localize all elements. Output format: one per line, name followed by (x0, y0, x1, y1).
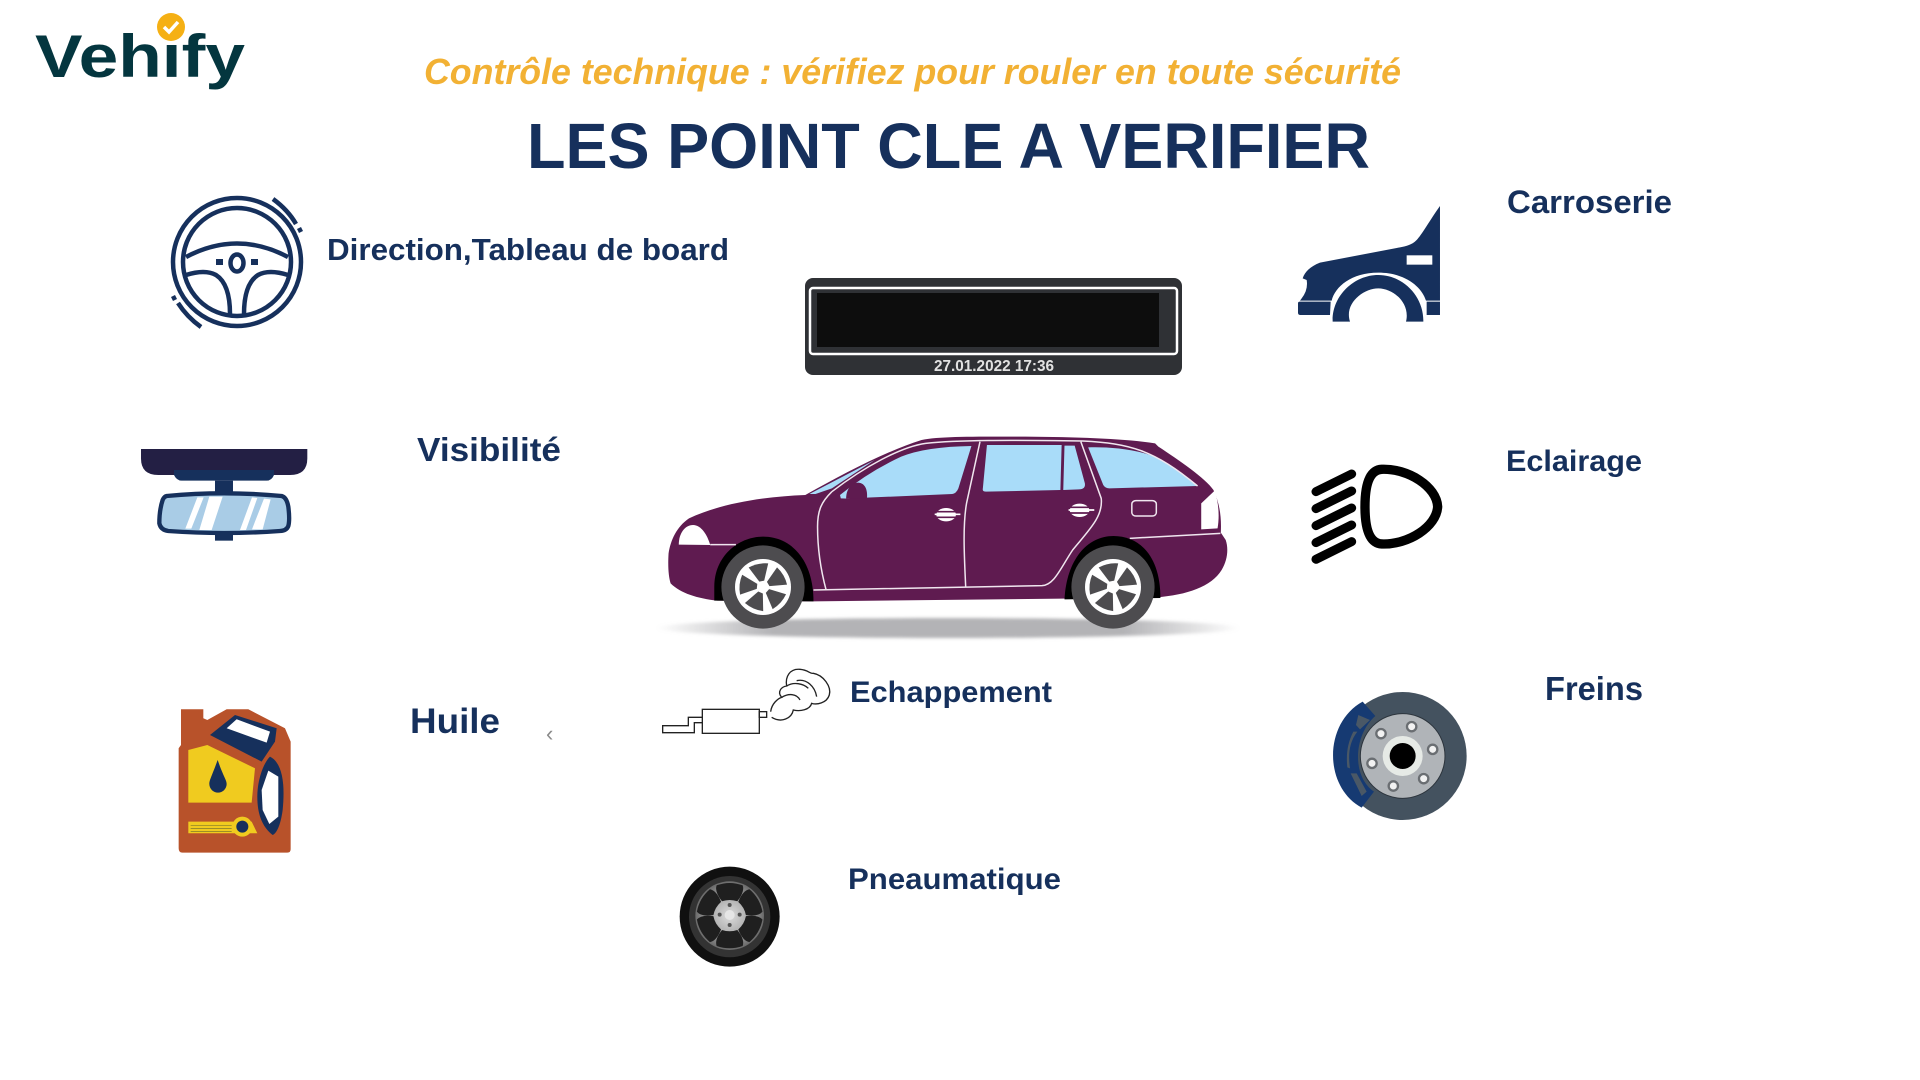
front wheel (721, 545, 805, 629)
icon: headlight (1316, 469, 1438, 559)
car shadow (656, 618, 1240, 638)
dashboard display (805, 278, 1182, 375)
rear wheel (1071, 545, 1155, 629)
car illustration (656, 437, 1240, 638)
logo: Vehify: Vehify (35, 23, 246, 90)
label: visibilite: Visibilité (417, 431, 561, 468)
label: huile: Huile (410, 702, 500, 741)
icon: car fender (1298, 206, 1440, 322)
label: echappement: Echappement (850, 676, 1052, 709)
car body (668, 437, 1227, 601)
label: freins: Freins (1545, 670, 1643, 707)
icon: rear-view mirror (141, 449, 307, 541)
label: pneumatique: Pneaumatique (848, 863, 1061, 896)
icon: exhaust with smoke (663, 669, 830, 733)
dashboard display: 27.01.2022 17:36 (934, 358, 1054, 375)
label: carroserie: Carroserie (1507, 184, 1672, 220)
icon: tyre (680, 867, 780, 967)
small chevron mark: ‹ (546, 721, 553, 746)
subtitle: Contrôle technique : vérifiez pour rouler en toute sécurité (424, 51, 1401, 92)
icon: steering wheel (173, 198, 301, 327)
label: eclairage: Eclairage (1506, 445, 1642, 478)
label: direction: Direction,Tableau de board (327, 232, 729, 267)
title: LES POINT CLE A VERIFIER (527, 110, 1370, 182)
icon: oil can (179, 709, 291, 853)
icon: brake disc (1333, 692, 1467, 820)
